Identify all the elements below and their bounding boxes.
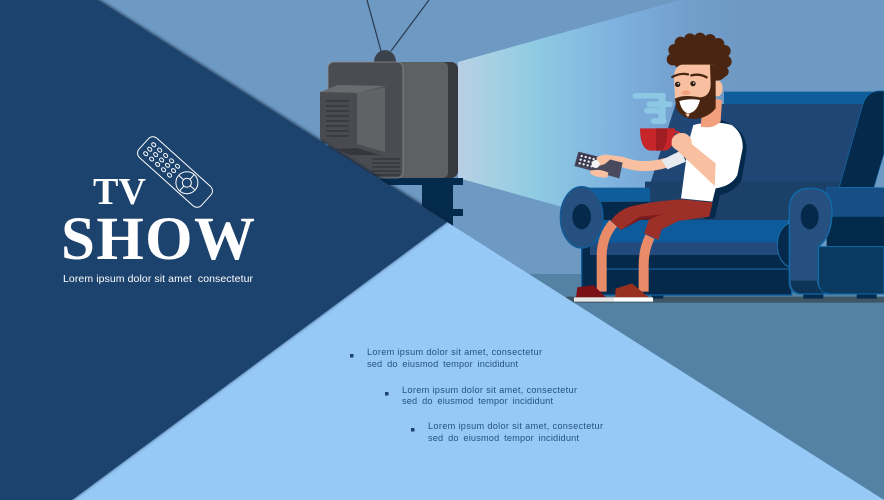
list item 1: Lorem ipsum dolor sit amet, consectetur [367, 347, 542, 357]
list item 3: sed do eiusmod tempor incididunt [428, 433, 579, 443]
sofa back [724, 92, 884, 104]
hair [667, 33, 732, 81]
right armrest [789, 188, 884, 294]
projected light beam [458, 0, 884, 300]
near leg [644, 237, 650, 292]
sofa and man illustration [560, 33, 884, 303]
icon: tv remote [135, 134, 215, 210]
eyes [675, 81, 696, 87]
cup [640, 128, 680, 151]
sofa [560, 91, 884, 299]
head [667, 33, 732, 119]
list item 2: Lorem ipsum dolor sit amet, consectetur [402, 385, 577, 395]
far shoe [574, 285, 613, 302]
seat cushion [589, 220, 788, 242]
torso shadow [693, 119, 747, 219]
hand on remote [590, 155, 613, 178]
far arm [603, 159, 667, 166]
far sleeve [662, 151, 686, 169]
near shoe [613, 283, 653, 302]
shorts [611, 199, 713, 240]
eye highlights [678, 82, 694, 84]
tv vents [326, 101, 400, 175]
light blue triangle panel [72, 222, 884, 500]
tv stand [380, 178, 463, 226]
ear [713, 80, 723, 96]
title: TV: TV [93, 171, 147, 213]
smile [679, 99, 700, 113]
list item 1: sed do eiusmod tempor incididunt [367, 359, 518, 369]
chin patch [685, 114, 690, 117]
floor [528, 274, 884, 500]
list item 2: sed do eiusmod tempor incididunt [402, 396, 553, 406]
sofa base [582, 233, 792, 295]
dark navy title panel [0, 0, 447, 500]
far leg [602, 223, 613, 292]
sideburn and beard [675, 65, 716, 119]
antenna [367, 0, 429, 51]
television [320, 0, 463, 226]
seat bulge [777, 222, 809, 268]
face [674, 65, 714, 118]
near arm and hand [672, 133, 716, 186]
list item 1 [350, 347, 542, 369]
sofa feet [652, 294, 877, 299]
eyebrows [672, 74, 707, 77]
antenna base [374, 50, 396, 62]
remote in hand [574, 152, 623, 178]
neck [701, 98, 722, 127]
tv cabinet [328, 62, 458, 178]
floor strip [566, 297, 884, 303]
steam [633, 93, 673, 124]
man [574, 33, 747, 302]
list item 3: Lorem ipsum dolor sit amet, consectetur [428, 421, 603, 431]
t-shirt [681, 122, 743, 202]
subtitle: Lorem ipsum dolor sit amet consectetur [63, 273, 254, 285]
list item 2 [385, 385, 577, 406]
left armrest [560, 187, 650, 248]
list item 3 [411, 421, 603, 443]
title: SHOW: SHOW [61, 206, 255, 273]
nose [682, 90, 690, 95]
tv screen housing [320, 85, 385, 155]
sofa side panel [839, 91, 884, 187]
